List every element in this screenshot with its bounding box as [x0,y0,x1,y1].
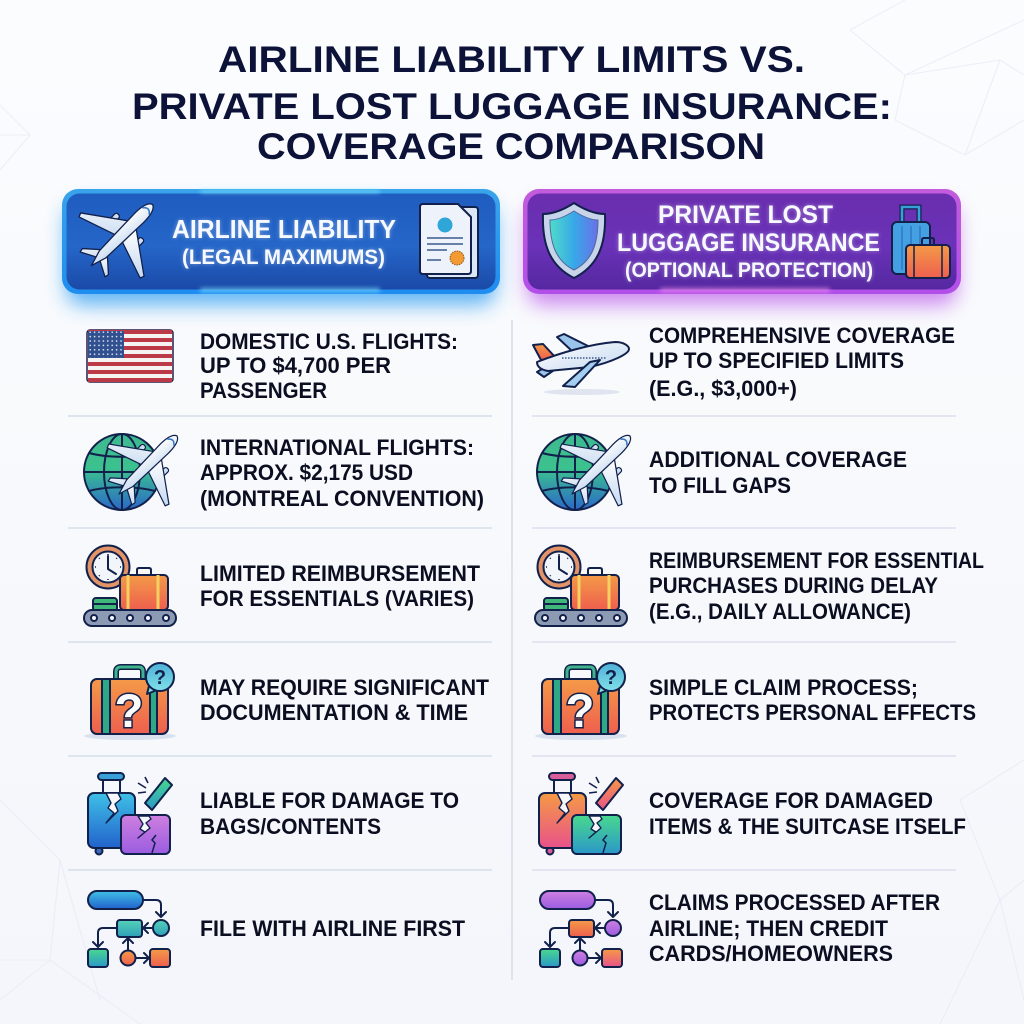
icon: side-view airplane [533,334,629,395]
icon: legal document [420,204,478,278]
title: PRIVATE LOST LUGGAGE INSURANCE: [132,86,892,127]
icon: damaged bags [539,773,623,854]
icon: claim flow chart [540,891,622,967]
icon: globe with plane [84,406,207,524]
text: damage: BAGS/CONTENTS [200,814,381,839]
icon: clock and baggage conveyor [84,546,176,626]
text: comprehensive coverage [649,323,955,401]
row: documentation [84,663,489,740]
text: international flights: APPROX. $2,175 USD [200,460,413,485]
column divider [511,320,513,980]
text: additional coverage [649,447,907,498]
row: damage [88,773,459,854]
text: comprehensive coverage: (E.G., $3,000+) [649,376,797,401]
icon: shield [543,203,605,278]
header text: (LEGAL MAXIMUMS) [182,246,385,269]
row: domestic flights [87,329,458,403]
text: domestic flights: UP TO $4,700 PER [200,353,391,378]
row: essential purchases [535,546,984,626]
text: essential purchases: PURCHASES DURING DELAY [649,573,938,598]
text: limited reimbursement: LIMITED REIMBURSEMENT [200,561,480,586]
text: comprehensive coverage: UP TO SPECIFIED LIMITS [649,348,904,373]
icon: luggage [892,207,950,278]
row: limited reimbursement [84,546,480,626]
text: essential purchases [649,548,984,624]
text: additional coverage: TO FILL GAPS [649,473,791,498]
text: essential purchases: (E.G., DAILY ALLOWANCE) [649,599,911,624]
text: simple claim [649,675,976,725]
title [132,39,892,167]
header text: LUGGAGE INSURANCE [617,229,880,257]
row: additional coverage [537,406,907,524]
text: additional coverage: ADDITIONAL COVERAGE [649,447,907,472]
icon: suitcase with question mark [84,663,176,740]
header text: AIRLINE LIABILITY [172,214,396,244]
row: file with airline [88,891,465,967]
icon: claim flow chart [88,891,170,967]
text: damage: LIABLE FOR DAMAGE TO [200,788,459,813]
text: international flights: (MONTREAL CONVENTION) [200,486,484,511]
text: domestic flights [200,329,458,403]
icon: airplane [60,173,184,297]
text: damaged items [649,788,966,839]
text: damage [200,788,459,839]
text: claims processed: CARDS/HOMEOWNERS [649,941,893,966]
row: damaged items [539,773,966,854]
header text: (OPTIONAL PROTECTION) [625,259,873,282]
text: documentation [200,675,489,725]
text: limited reimbursement: FOR ESSENTIALS (VARIES) [200,586,474,611]
panel: airline liability header [60,173,500,305]
text: claims processed [649,890,940,966]
text: claims processed: CLAIMS PROCESSED AFTER [649,890,940,915]
row: simple claim [535,663,976,740]
icon: damaged bags [88,773,172,854]
text: comprehensive coverage: COMPREHENSIVE COVERAGE [649,323,955,348]
header text [172,214,396,269]
text: simple claim: SIMPLE CLAIM PROCESS; [649,675,918,700]
text: international flights [200,435,484,511]
icon: globe with plane [537,406,660,524]
title: COVERAGE COMPARISON [257,126,765,167]
text: damaged items: COVERAGE FOR DAMAGED [649,788,933,813]
text: domestic flights: DOMESTIC U.S. FLIGHTS: [200,329,458,354]
panel: private lost luggage insurance header [523,189,961,305]
header text [617,201,880,282]
left row dividers [68,416,492,870]
text: claims processed: AIRLINE; THEN CREDIT [649,916,888,941]
text: essential purchases: REIMBURSEMENT FOR ESSENTIAL [649,548,984,573]
text: domestic flights: PASSENGER [200,378,327,403]
text: simple claim: PROTECTS PERSONAL EFFECTS [649,700,976,725]
text: documentation: DOCUMENTATION & TIME [200,700,468,725]
icon: us flag [87,330,173,382]
row: international flights [84,406,484,524]
row: claims processed [540,890,940,967]
text: damaged items: ITEMS & THE SUITCASE ITSELF [649,814,966,839]
row: comprehensive coverage [533,323,955,401]
text: limited reimbursement [200,561,480,611]
icon: clock and baggage conveyor [535,546,627,626]
right row dividers [532,416,956,870]
text: file with airline: FILE WITH AIRLINE FIRST [200,916,465,941]
icon: suitcase with question mark [535,663,627,740]
text: documentation: MAY REQUIRE SIGNIFICANT [200,675,489,700]
header text: PRIVATE LOST [658,201,833,229]
text: international flights: INTERNATIONAL FLIGHTS: [200,435,474,460]
title: AIRLINE LIABILITY LIMITS VS. [218,39,805,80]
